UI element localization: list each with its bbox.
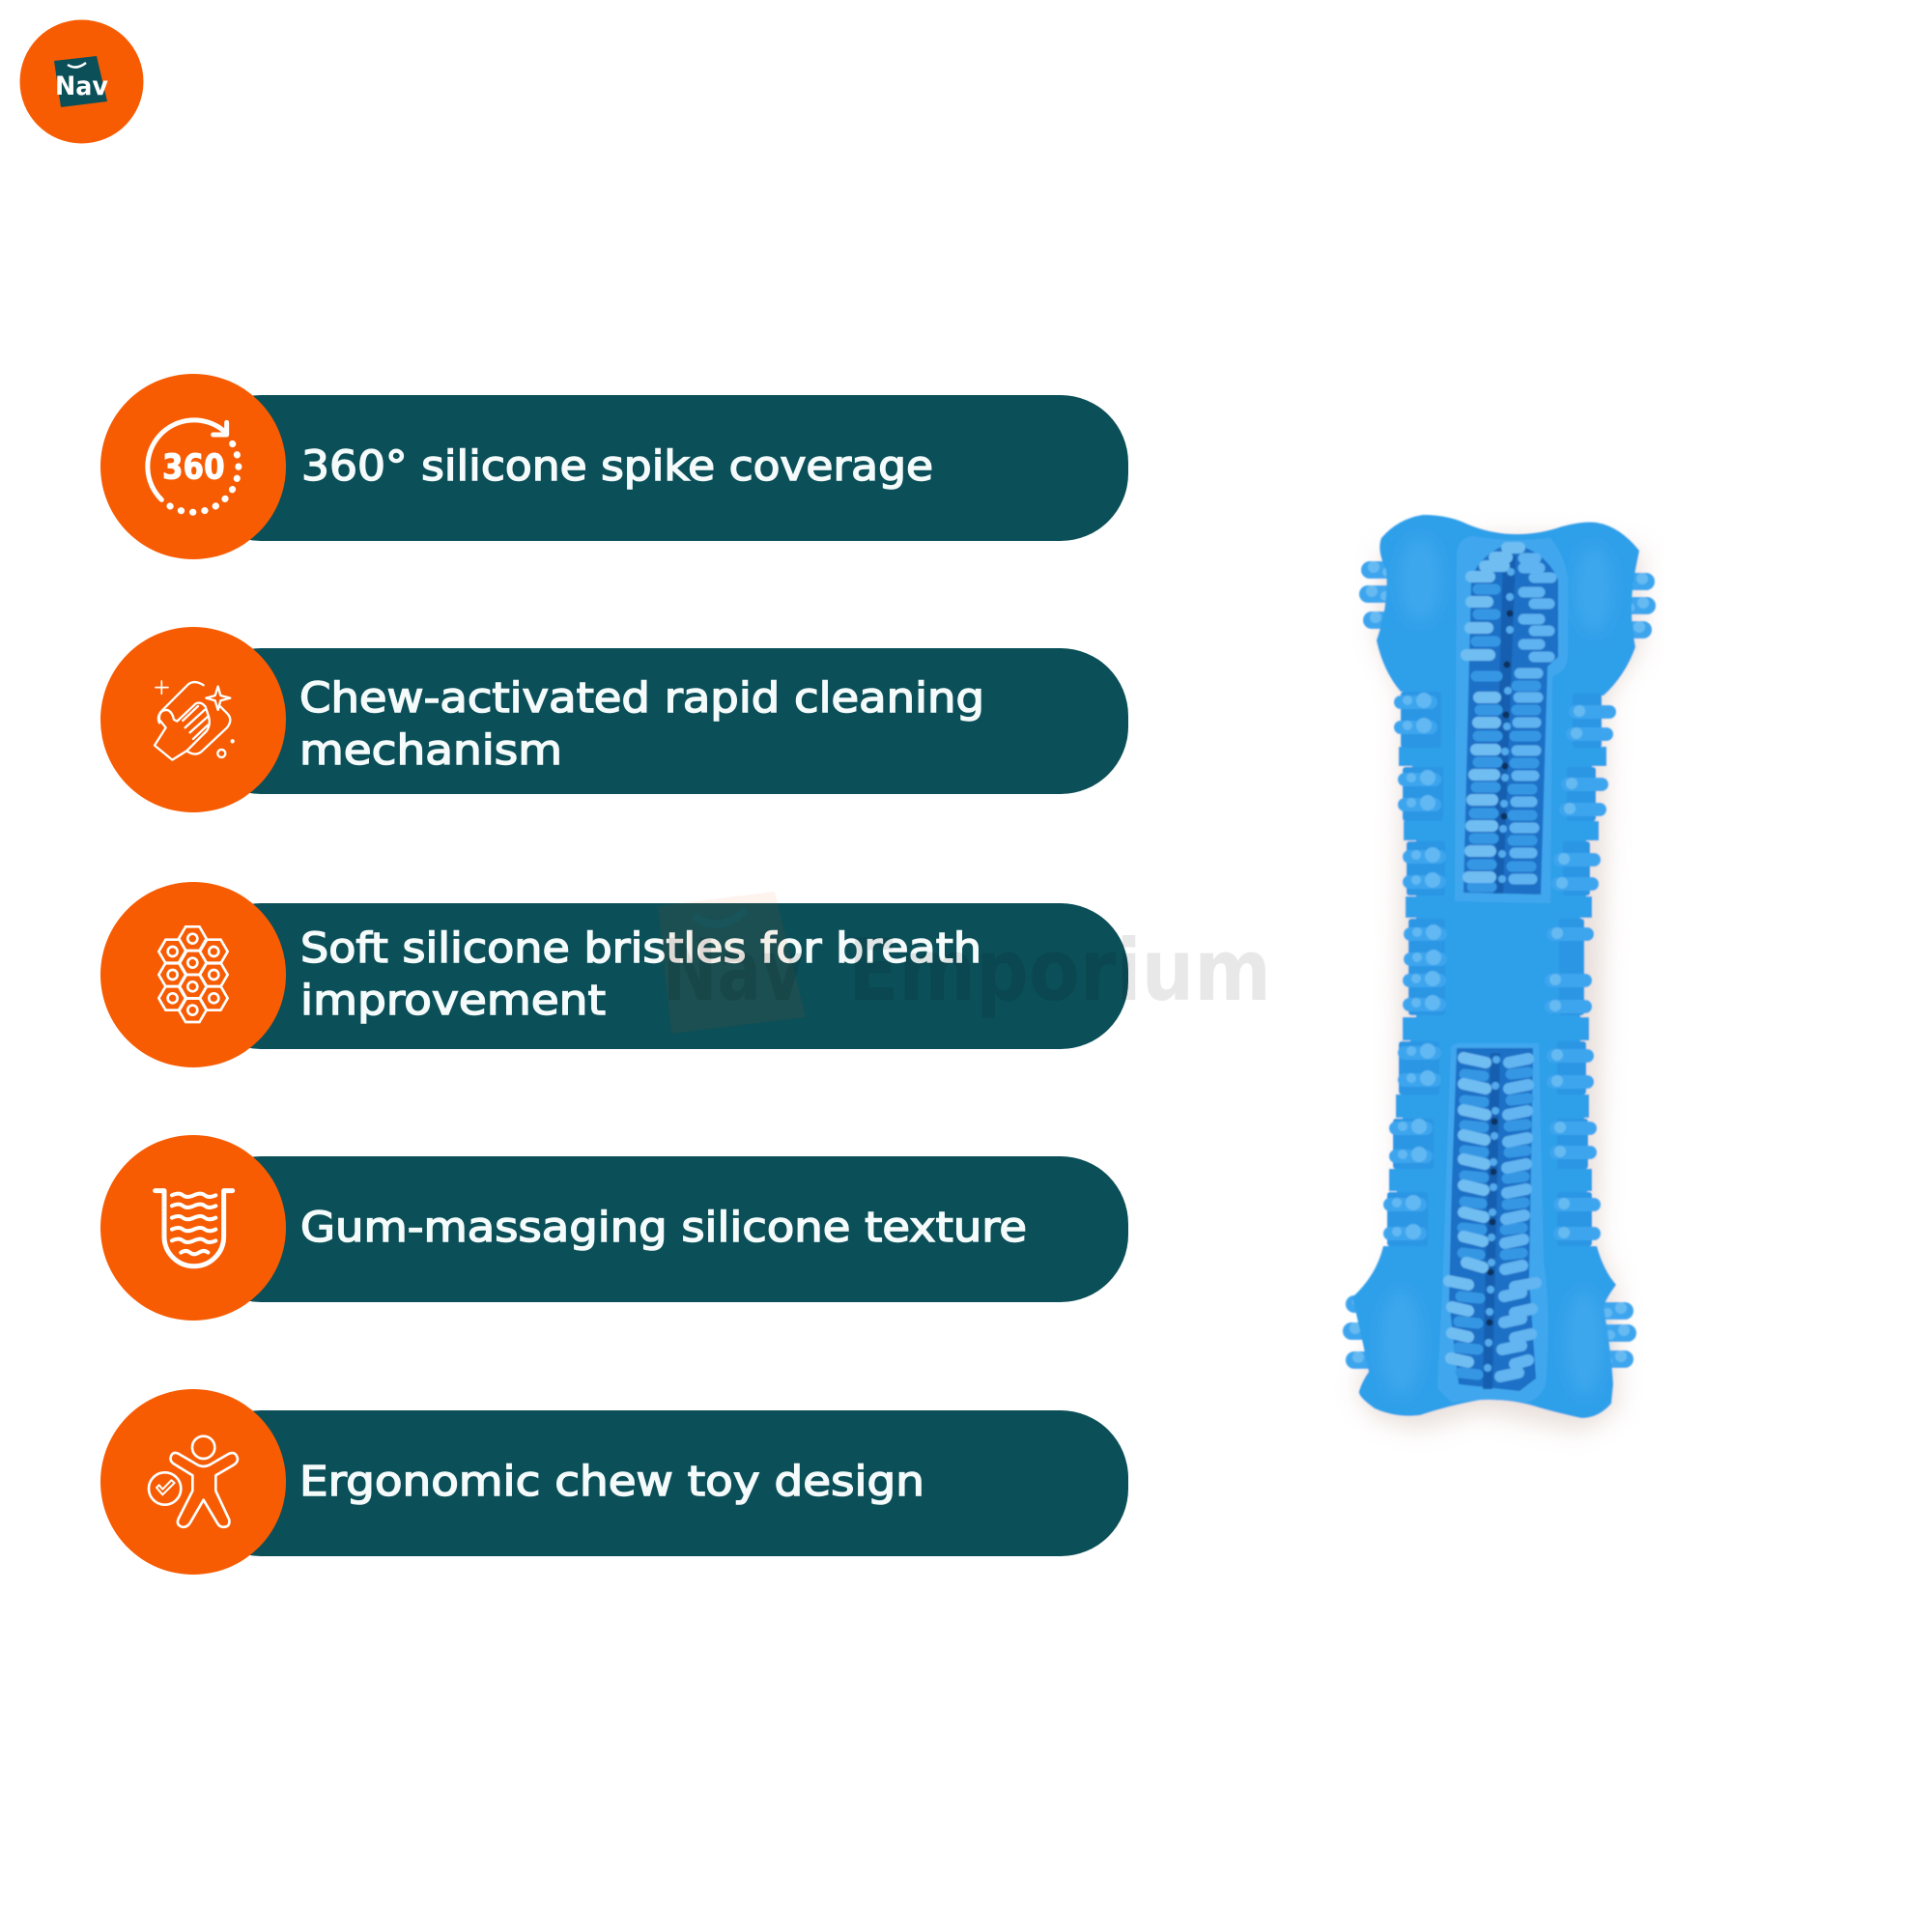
icon circle [100, 374, 286, 559]
upper dark holes [1501, 611, 1513, 819]
icon: gum waves [156, 1191, 233, 1266]
side nubs right [1549, 705, 1609, 1238]
icon: 360 rotation [148, 420, 239, 512]
icon: honeycomb [158, 926, 228, 1022]
label: 360° silicone spike coverage [301, 442, 933, 491]
product: blue bone chew toy [1350, 515, 1649, 1432]
icon circle [100, 627, 286, 812]
toy shadow [1357, 536, 1642, 1432]
lower bristle channel [1437, 1043, 1548, 1403]
toy body [1352, 515, 1639, 1418]
side nubs left [1390, 693, 1441, 1239]
logo badge [19, 19, 143, 143]
lower dark holes [1486, 1119, 1497, 1325]
label: Gum-massaging silicone texture [300, 1204, 1027, 1252]
feature row 2: chew activated cleaning [100, 627, 1128, 812]
pill [193, 395, 1128, 541]
pill [193, 903, 1128, 1049]
icon circle [100, 882, 286, 1067]
label: Soft silicone bristles for breath [300, 924, 981, 973]
icon: person with check [149, 1436, 238, 1527]
watermark: Emporium [848, 921, 1271, 1020]
feature row 4: gum massage [100, 1135, 1128, 1321]
logo badge: Nav [55, 71, 108, 101]
upper dark bristles [1472, 589, 1536, 887]
side panels [1387, 692, 1602, 1246]
pill [193, 648, 1128, 794]
end knobs [1350, 561, 1649, 1367]
pill [193, 1156, 1128, 1302]
label: Ergonomic chew toy design [299, 1458, 924, 1506]
icon circle [100, 1389, 286, 1575]
feature row 3: soft bristles: improvement [300, 977, 606, 1025]
feature row 3: soft bristles [100, 882, 1128, 1067]
icon circle [100, 1135, 286, 1321]
pill [193, 1410, 1128, 1556]
lower spine dots [1484, 1056, 1500, 1372]
icon: 360 rotation: 360 [162, 447, 225, 487]
upper bristle channel [1455, 536, 1568, 903]
lower left bristles [1449, 1058, 1486, 1362]
body highlights [1379, 536, 1613, 1396]
watermark: Nav [663, 921, 804, 1020]
upper spine dots [1498, 568, 1515, 883]
upper left bristles [1466, 548, 1520, 877]
icon: wiping hand [155, 681, 234, 760]
feature row 2: chew activated cleaning: mechanism [299, 726, 562, 775]
feature row 5: ergonomic design [100, 1389, 1128, 1575]
upper right bristles [1514, 558, 1551, 879]
lower right bristles [1500, 1059, 1536, 1377]
lower dark bristles [1459, 1072, 1528, 1375]
label: Chew-activated rapid cleaning [299, 674, 984, 723]
feature row 1: 360 coverage [100, 374, 1128, 559]
watermark [658, 892, 1271, 1034]
